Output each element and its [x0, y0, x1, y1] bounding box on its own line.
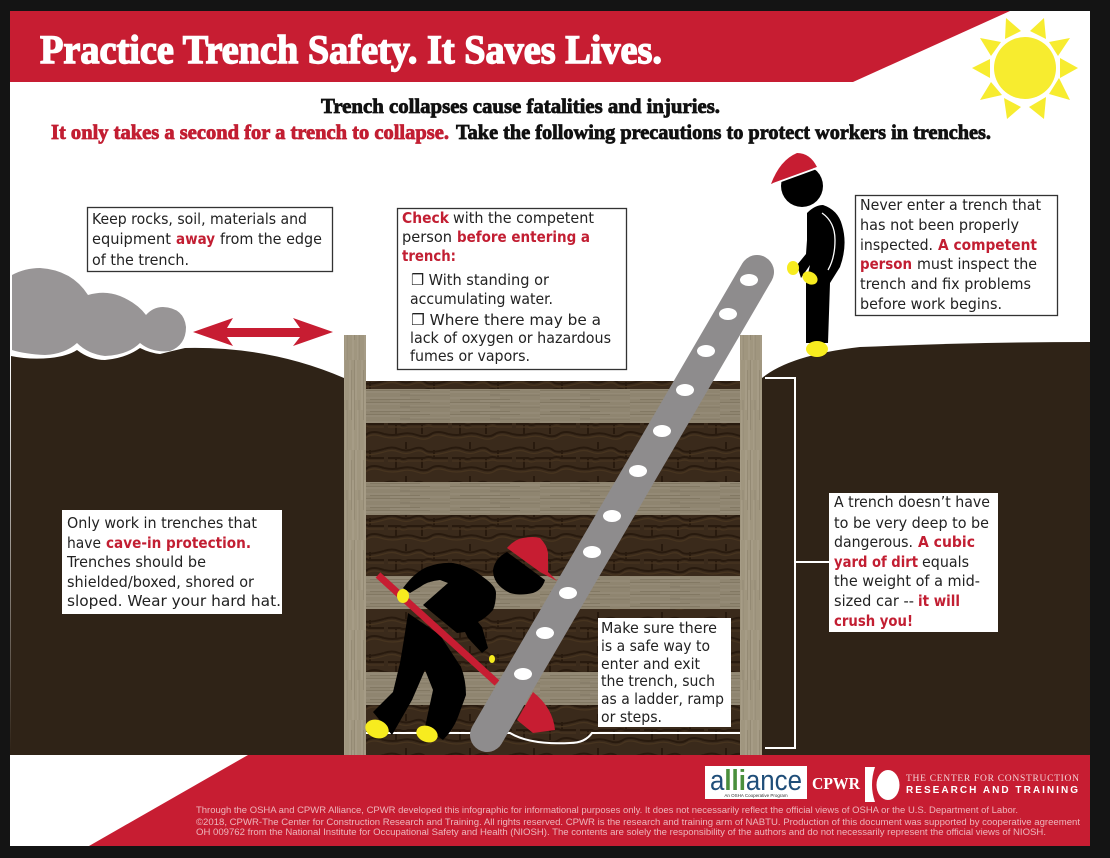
- pile of rocks: [12, 268, 186, 356]
- callout: cubic yard of dirt: equals: [922, 553, 969, 571]
- logo: alliance: alliance: [710, 765, 802, 797]
- callout: keep materials away: [88, 208, 332, 272]
- hard hat: [507, 537, 557, 581]
- callout: safe way to enter and exit: enter and exit: [601, 655, 701, 673]
- callout: cubic yard of dirt: the weight of a mid-: [834, 572, 980, 590]
- disclaimer: Through the OSHA and CPWR Alliance, CPWR developed this infographic for informational purposes only. It does not necessarily reflect the official views of OSHA or the U.S. Department of Labor.: [196, 805, 1018, 815]
- header banner: [10, 11, 1010, 82]
- callout: keep materials away: of the trench.: [92, 251, 189, 269]
- planks: [365, 389, 741, 705]
- right post: [740, 335, 762, 755]
- intro line two red: It only takes a second for a trench to collapse.: [51, 120, 449, 144]
- callout: competent person inspection: A competent: [938, 236, 1037, 254]
- ladder: [487, 272, 758, 735]
- arm highlight: [822, 213, 835, 270]
- callout: check with competent person: ❒ Where there may be a: [411, 311, 601, 329]
- callout: cubic yard of dirt: it will: [918, 592, 960, 610]
- callout: safe way to enter and exit: the trench, such: [601, 672, 715, 690]
- gloves and boots: [363, 589, 495, 745]
- worker torso and arms: [403, 563, 496, 653]
- left post: [344, 335, 366, 755]
- left ground: [10, 348, 344, 755]
- arrow: keep-away distance: [193, 318, 333, 346]
- footer banner: [89, 755, 1090, 846]
- hat brim highlight: [773, 168, 817, 184]
- callout: cubic yard of dirt: crush you!: [834, 612, 913, 630]
- callout: check with competent person: with the competent: [453, 209, 595, 227]
- worker head: [493, 552, 545, 594]
- intro text: [51, 94, 991, 144]
- callout: cubic yard of dirt: A cubic: [918, 533, 975, 551]
- logo: CPWR: RESEARCH AND TRAINING: [906, 785, 1078, 796]
- callout: safe way to enter and exit: or steps.: [601, 708, 662, 726]
- standing worker: [771, 153, 845, 357]
- right ground: [762, 342, 1090, 755]
- logo: CPWR: CPWR: [812, 774, 861, 793]
- callout: check with competent person: fumes or vapors.: [410, 347, 530, 365]
- trench floor line: [366, 733, 740, 743]
- callout: cave-in protection: Trenches should be: [66, 553, 206, 571]
- worker head: [781, 165, 823, 207]
- callout: competent person inspection: [856, 196, 1058, 316]
- shovel blade: [517, 692, 555, 733]
- callout: competent person inspection: Never enter a trench that: [860, 196, 1042, 214]
- callout: competent person inspection: has not been properly: [860, 216, 1019, 234]
- callout: safe way to enter and exit: as a ladder, ramp: [601, 690, 724, 708]
- callout: competent person inspection: person: [860, 255, 912, 273]
- shovel handle: [378, 575, 497, 683]
- callout: keep materials away: equipment: [92, 230, 172, 248]
- gloves and boots: [787, 261, 828, 357]
- logo: CPWR: [812, 767, 1079, 802]
- worker in trench with shovel: [363, 537, 557, 745]
- depth bracket: [765, 378, 830, 748]
- callout: cubic yard of dirt: yard of dirt: [834, 553, 918, 571]
- callout: competent person inspection: before work begins.: [860, 295, 1002, 313]
- title: Practice Trench Safety. It Saves Lives.: [40, 27, 662, 72]
- callout: check with competent person: [398, 208, 626, 370]
- callout: keep materials away: away: [176, 230, 215, 248]
- logo: alliance: An OSHA Cooperative Program: [724, 793, 788, 798]
- trench: [344, 335, 762, 755]
- disclaimer: ©2018, CPWR-The Center for Construction Research and Training. All rights reserved. CPWR is the research and training arm of NABTU. Production of this document was supported by cooperative agreement: [196, 817, 1081, 827]
- callout: check with competent person: ❒ With standing or: [411, 271, 549, 289]
- callout: cave-in protection: cave-in protection.: [106, 534, 251, 552]
- callout: cubic yard of dirt: [829, 493, 998, 632]
- callout: competent person inspection: must inspect the: [917, 255, 1037, 273]
- callout: keep materials away: from the edge: [220, 230, 322, 248]
- callout: check with competent person: lack of oxygen or hazardous: [410, 329, 611, 347]
- callout: cave-in protection: Only work in trenches that: [67, 514, 258, 532]
- callout: check with competent person: before entering a: [457, 228, 590, 246]
- intro line two black: Take the following precautions to protect workers in trenches.: [456, 120, 991, 144]
- callout: cave-in protection: sloped. Wear your hard hat.: [67, 592, 281, 610]
- callout: competent person inspection: inspected.: [860, 236, 933, 254]
- callout: safe way to enter and exit: [598, 618, 731, 727]
- hard hat: [771, 153, 817, 184]
- callout: cave-in protection: shielded/boxed, shored or: [67, 573, 254, 591]
- logo: CPWR: THE CENTER FOR CONSTRUCTION: [906, 774, 1079, 784]
- callout: cubic yard of dirt: sized car --: [834, 592, 914, 610]
- worker body: [797, 205, 845, 343]
- trench soil wall: [365, 381, 741, 755]
- worker legs: [373, 613, 466, 740]
- callout: check with competent person: accumulating water.: [410, 290, 553, 308]
- callout: safe way to enter and exit: is a safe way to: [601, 637, 710, 655]
- disclaimer: OH 009762 from the National Institute for Occupational Safety and Health (NIOSH). The contents are solely the responsibility of the authors and do not necessarily represent the official views of NIOSH.: [196, 827, 1046, 837]
- callout: cubic yard of dirt: A trench doesn’t have: [834, 493, 990, 511]
- callout: competent person inspection: trench and fix problems: [860, 275, 1031, 293]
- callout: cave-in protection: [62, 510, 282, 614]
- callout: check with competent person: trench:: [402, 247, 456, 265]
- callout: check with competent person: person: [402, 228, 452, 246]
- callout: check with competent person: Check: [402, 209, 450, 227]
- disclaimer: [196, 805, 1081, 837]
- callout: cave-in protection: have: [67, 534, 101, 552]
- ladder rungs: [514, 274, 758, 680]
- callout: cubic yard of dirt: dangerous.: [834, 533, 913, 551]
- callout: cubic yard of dirt: to be very deep to be: [834, 514, 989, 532]
- intro line one: Trench collapses cause fatalities and injuries.: [321, 94, 720, 118]
- callout: keep materials away: Keep rocks, soil, materials and: [92, 210, 307, 228]
- callout: safe way to enter and exit: Make sure there: [601, 619, 717, 637]
- icon: sun: [972, 18, 1078, 119]
